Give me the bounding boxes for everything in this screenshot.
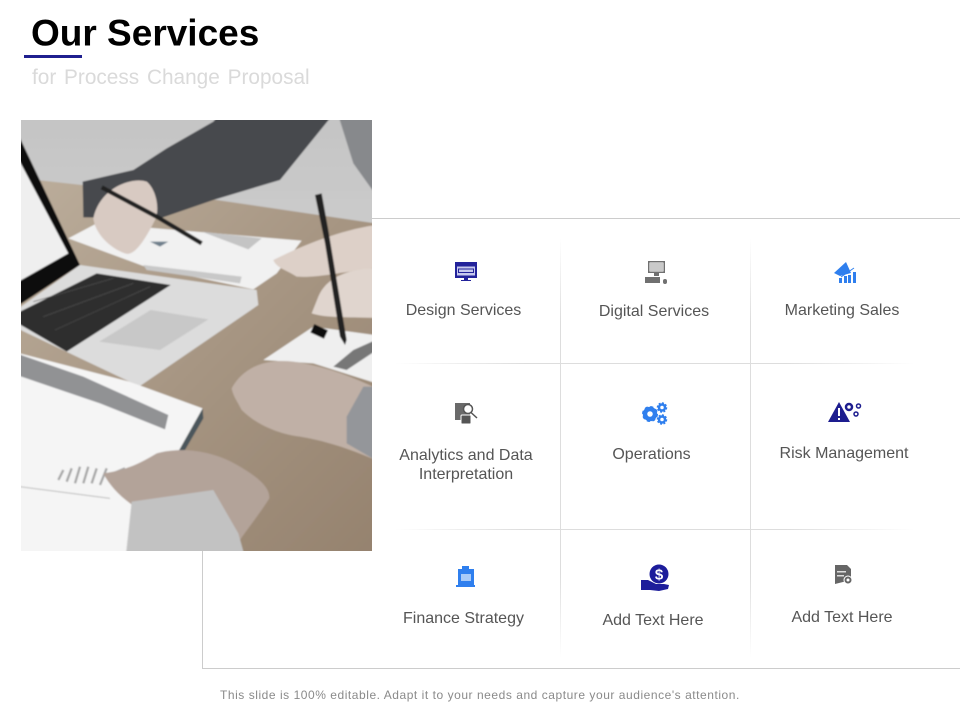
service: Finance Strategy [403, 566, 524, 627]
label: Add Text Here [602, 612, 704, 629]
service: Digital Services [599, 261, 709, 320]
icon: warning triangle and gears [828, 402, 860, 422]
service: Operations [612, 403, 691, 463]
icon: design monitor [455, 262, 477, 281]
service: Analytics and Data Interpretation [399, 403, 533, 483]
icon: document, magnifier and database [455, 403, 477, 424]
label: Interpretation [419, 466, 513, 483]
icon: finance clipboard [456, 566, 475, 587]
service: Marketing Sales [785, 262, 899, 319]
label: Add Text Here [791, 609, 893, 626]
title underline [24, 55, 82, 58]
subtitle: for Process Change Proposal [32, 66, 310, 89]
panel frame [202, 218, 960, 668]
footer note: This slide is 100% editable. Adapt it to your needs and capture your audience's attention. [220, 688, 740, 702]
icon: gears [643, 403, 666, 424]
service: Add Text Here (right) [791, 565, 893, 626]
photo: business team at a desk [21, 120, 372, 551]
label: Finance Strategy [403, 610, 524, 627]
title: Our Services [31, 12, 259, 54]
label: Operations [612, 446, 691, 463]
label: Risk Management [780, 445, 909, 462]
service: Add Text Here (centre) [602, 564, 704, 629]
icon: document with gear [835, 565, 852, 584]
label: Digital Services [599, 303, 709, 320]
label: Analytics and Data [399, 447, 533, 464]
label: Marketing Sales [785, 302, 899, 319]
label: Design Services [406, 302, 521, 319]
icon: hand holding dollar coin: $ [655, 566, 664, 584]
icon: desktop computer [645, 261, 667, 284]
service: Design Services [406, 262, 521, 319]
service: Risk Management [780, 402, 909, 462]
icon: megaphone and growth bars [834, 262, 856, 283]
